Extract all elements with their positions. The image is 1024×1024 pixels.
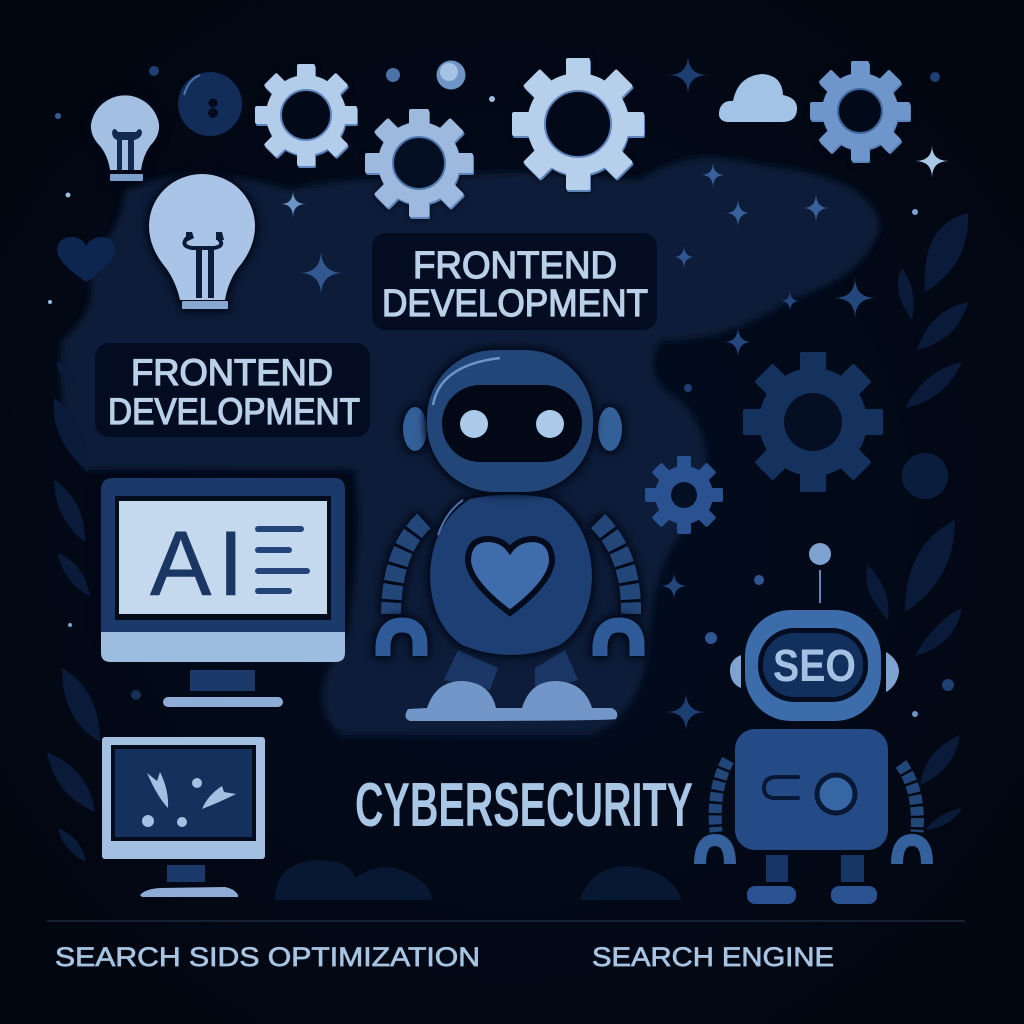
monitor stand (190, 670, 255, 691)
monitor: AI (101, 478, 345, 707)
main robot (383, 350, 637, 721)
monitor screen (115, 496, 331, 620)
SEO hands (700, 840, 927, 864)
icon: dark gear (743, 352, 883, 492)
SEO label: SEO (773, 640, 856, 691)
monitor chin (101, 632, 345, 662)
second monitor stand (167, 865, 205, 882)
SEO ears (730, 652, 899, 692)
second monitor screen (111, 745, 256, 841)
second monitor shapes (142, 772, 236, 827)
SEO antenna (809, 543, 831, 603)
icon: small light bulb (91, 95, 159, 181)
monitor display (119, 501, 327, 614)
second monitor display (115, 749, 252, 837)
SEO visor (758, 628, 868, 702)
second monitor base (140, 887, 238, 897)
monitor: second (102, 737, 265, 897)
footer label right: SEARCH ENGINE (592, 942, 834, 972)
SEO body (735, 729, 888, 850)
stars (281, 55, 949, 732)
second monitor frame (102, 737, 265, 859)
icon: gear 2 (365, 109, 473, 217)
icon: gear 4 (810, 61, 910, 161)
bottom dark clouds (275, 860, 682, 900)
background leaves (47, 213, 968, 862)
robot legs (444, 650, 578, 692)
robot head (427, 350, 593, 492)
SEO button (817, 775, 855, 813)
SEO robot (700, 543, 927, 904)
icon: big light bulb (149, 174, 255, 309)
icon: light ball (436, 60, 466, 90)
SEO feet (747, 886, 877, 904)
robot arms (391, 521, 631, 614)
icon: dark ball (178, 72, 242, 136)
footer label left: SEARCH SIDS OPTIMIZATION (55, 942, 480, 972)
SEO slot (764, 777, 798, 798)
icon: small gear (645, 456, 723, 534)
robot feet (405, 681, 617, 721)
panel: frontend development left (95, 343, 370, 437)
icon: cloud (719, 74, 797, 122)
heading: frontend left: FRONTEND (131, 352, 333, 393)
monitor text lines (258, 529, 307, 591)
AI text: I (218, 513, 244, 615)
SEO head (745, 610, 881, 721)
robot heart (468, 539, 552, 613)
SEO arms (715, 760, 917, 832)
SEO legs (766, 855, 864, 882)
background blob (61, 158, 880, 735)
icon: gear 1 (255, 64, 357, 166)
icon: gear 3 large (512, 58, 644, 190)
decorative dots (48, 66, 954, 717)
heading: cybersecurity: CYBERSECURITY (355, 771, 693, 840)
heading: frontend top: FRONTEND (413, 245, 617, 287)
robot eyes (460, 410, 564, 438)
heading: development left: DEVELOPMENT (108, 391, 360, 432)
SEO visor inner (763, 633, 863, 697)
monitor base (163, 697, 283, 707)
AI text: A (150, 513, 211, 615)
robot hands (383, 625, 637, 656)
icon: dark heart (57, 237, 115, 282)
heading: development top: DEVELOPMENT (382, 283, 648, 325)
robot ears (403, 407, 622, 451)
monitor frame (101, 478, 345, 633)
robot body (430, 494, 592, 655)
panel: frontend development top (372, 233, 657, 330)
